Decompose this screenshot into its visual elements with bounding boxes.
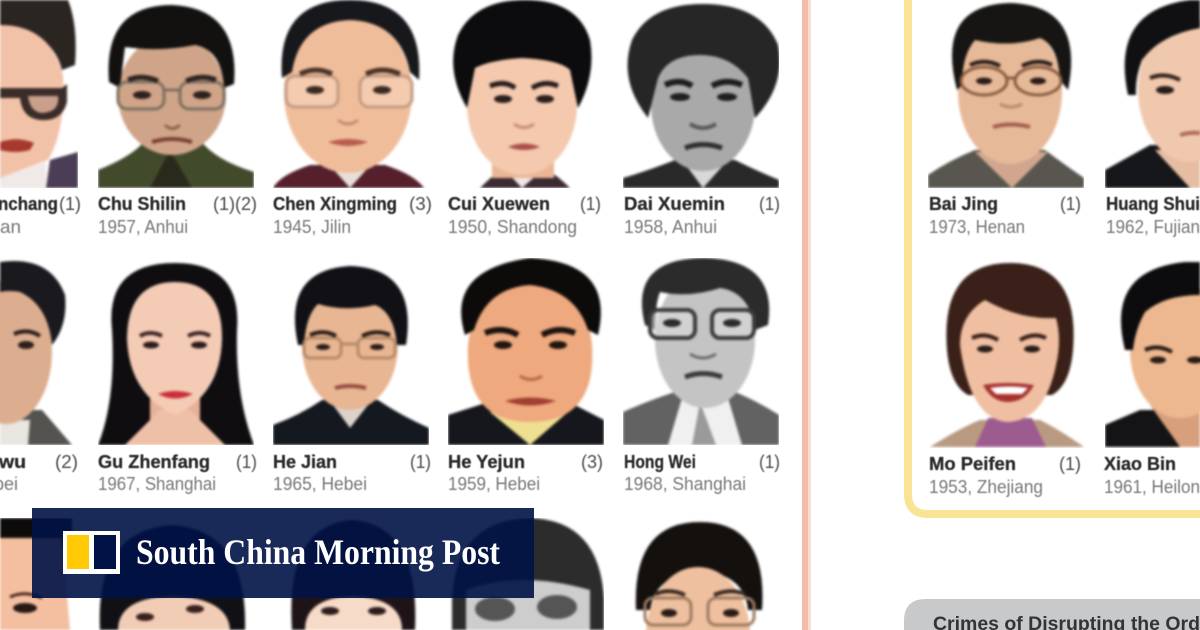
captions: row 2: Hong Wei (624, 452, 696, 472)
captions: row 1: an (0, 217, 21, 237)
captions: row 1: Dai Xuemin (624, 194, 725, 214)
captions: yellow panel: Mo Peifen (929, 454, 1016, 474)
captions: row 1: 1950, Shandong (448, 217, 577, 237)
portrait: Cui Xuewen (451, 0, 594, 188)
captions: row 1: Chen Xingming (273, 194, 397, 214)
captions: row 2: 1968, Shanghai (624, 474, 746, 494)
portrait: Dai Xuemin (greyscale) (623, 2, 779, 188)
captions: row 2: He Jian (273, 452, 337, 472)
portrait: cropped man with dark glasses, row 1 (0, 0, 78, 188)
captions: row 1: Cui Xuewen (448, 194, 550, 214)
captions: yellow panel: (1) (1059, 454, 1081, 474)
banner: South China Morning Post (32, 508, 534, 598)
captions: row 2: (1) (236, 452, 257, 472)
portrait: man with glasses, col 4 row 3 (634, 520, 764, 630)
captions: row 1: (3) (409, 194, 432, 214)
captions: row 2: (1) (410, 452, 431, 472)
captions: row 2: Gu Zhenfang (98, 452, 210, 472)
captions: yellow panel: (1) (1060, 194, 1081, 214)
portrait: Huang Shui (cropped) (1105, 0, 1200, 188)
panel: yellow outlined group (908, 0, 1200, 514)
captions: row 1: Chu Shilin (98, 194, 186, 214)
captions: row 1 (0, 194, 780, 237)
banner title: South China Morning Post (136, 532, 500, 572)
portrait: woman behind banner, col 2 row 3 (289, 520, 418, 630)
captions: yellow panel: Xiao Bin (1104, 454, 1176, 474)
portrait: woman behind banner, col 1 row 3 (98, 524, 248, 630)
portrait: He Yejun (448, 258, 604, 445)
captions: row 1: 1958, Anhui (624, 217, 717, 237)
captions: yellow panel: Bai Jing (929, 194, 998, 214)
portrait: Bai Jing (928, 1, 1084, 188)
portrait: Chen Xingming (273, 0, 425, 188)
captions: row 1: (1) (59, 194, 81, 214)
captions: row 2: He Yejun (448, 452, 525, 472)
captions: row 2: (2) (55, 452, 78, 472)
panel: grey crimes heading (904, 599, 1200, 630)
portrait: Mo Peifen (930, 261, 1084, 448)
captions: row 2: 1965, Hebei (273, 474, 367, 494)
portrait: greyscale man behind banner, col 3 row 3 (450, 518, 604, 630)
portrait: Xiao Bin (cropped) (1105, 260, 1200, 448)
captions: row 2: (1) (759, 452, 780, 472)
captions: yellow panel: 1953, Zhejiang (929, 477, 1043, 497)
portrait: cropped man in suit, row 2 (0, 259, 73, 445)
captions: row 1: 1945, Jilin (273, 217, 351, 237)
captions: row 2: 1959, Hebei (448, 474, 540, 494)
captions: row 2 (0, 452, 780, 494)
portrait: cropped man, row 3 (0, 518, 72, 630)
portrait: He Jian (273, 264, 429, 445)
captions: row 1: (1)(2) (213, 194, 257, 214)
captions: row 2: (3) (581, 452, 603, 472)
portrait: Hong Wei (greyscale) (623, 258, 779, 445)
portrait: Chu Shilin (98, 3, 254, 188)
icon: SCMP logo (63, 531, 120, 574)
captions: row 1: (1) (759, 194, 780, 214)
captions: yellow panel: 1973, Henan (929, 217, 1025, 237)
panel divider: pink vertical line (802, 0, 811, 630)
captions: yellow panel (929, 194, 1200, 497)
captions: row 1: 1957, Anhui (98, 217, 188, 237)
captions: row 1: (1) (580, 194, 601, 214)
portrait: Gu Zhenfang (98, 261, 254, 445)
captions: row 2: 1967, Shanghai (98, 474, 216, 494)
